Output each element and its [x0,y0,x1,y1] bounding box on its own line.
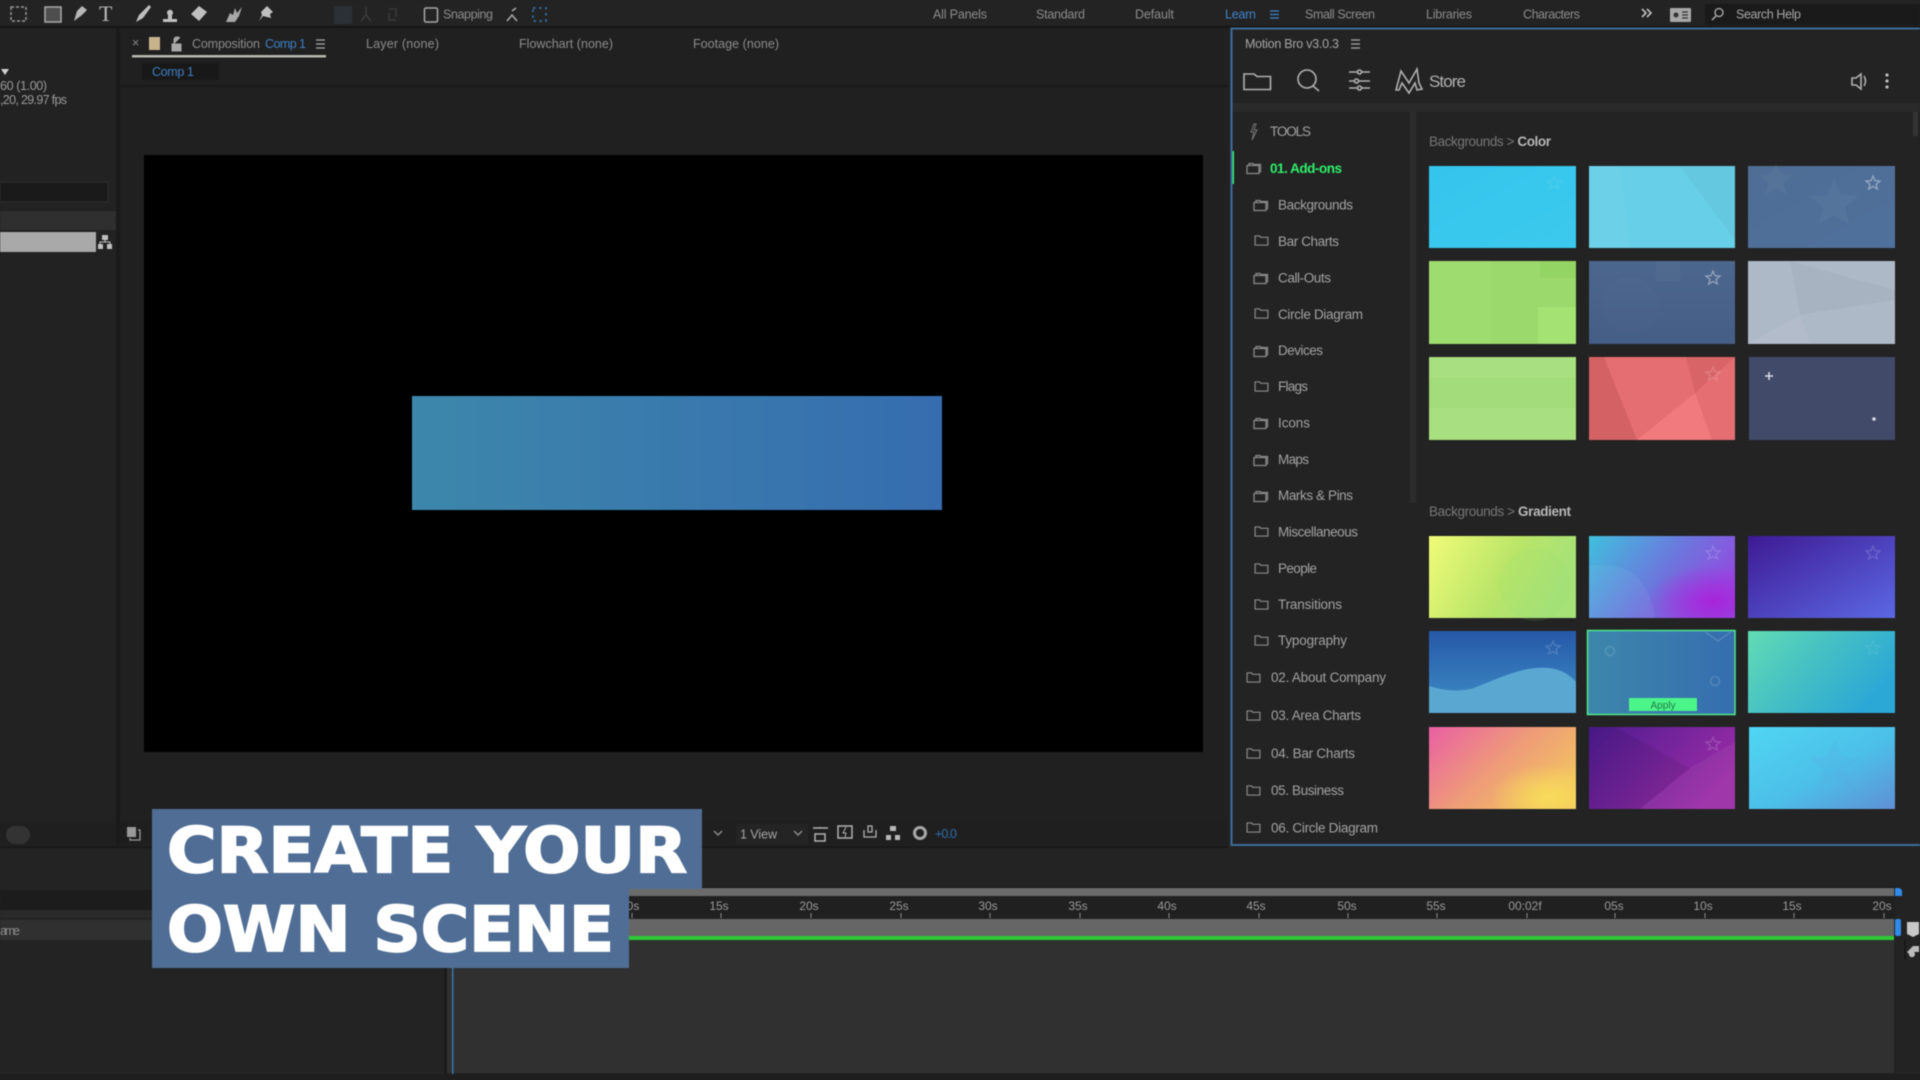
timeline layer header: ame [0,924,20,938]
heading: backgrounds gradient: Backgrounds > Gradient [1429,504,1572,519]
thumbnail: blue waves [1429,631,1576,713]
workspace tabs [933,8,1651,22]
left project panel [0,28,120,845]
sidebar: subcategory list: Backgrounds [1278,198,1353,212]
time ruler: 15s [709,899,729,913]
thumbnail: coral [1589,357,1735,440]
thumbnail: green blocks [1429,261,1576,344]
thumbnail: navy [1589,261,1735,344]
time ruler: 30s [978,899,998,913]
comp breadcrumb: Comp 1 [152,65,194,79]
sidebar: subcategory list: Transitions [1278,597,1342,612]
sidebar: subcategory list: Circle Diagram [1278,307,1363,322]
thumbnail: slate star [1748,162,1895,248]
snapping checkbox: Snapping [443,8,493,22]
sidebar: main categories: 03. Area Charts [1271,708,1361,723]
top toolbar [0,1,1920,28]
playhead [452,968,454,1074]
sidebar: subcategory list: Maps [1278,452,1309,467]
thumbnail: blue violet [1589,536,1735,618]
search help box [1670,4,1920,25]
panel title: Motion Bro v3.0.3 [1245,37,1339,51]
gradient background layer [412,396,942,510]
panel tabs: Flowchart (none) [519,37,613,51]
sidebar: subcategory list: Marks & Pins [1278,488,1353,503]
time ruler: 45s [1246,899,1266,913]
sidebar: main categories: 04. Bar Charts [1271,746,1355,761]
workspace tabs: All Panels [933,8,987,22]
time ruler: 0s [627,899,639,913]
sidebar: subcategory list: Bar Charts [1278,234,1339,249]
sidebar: active category: 01. Add-ons [1270,161,1342,176]
workspace tabs: Learn [1225,8,1256,22]
thumbnail: light green [1429,357,1576,440]
panel tabs: × [132,36,139,50]
thumbnail: yellow green [1429,536,1576,621]
caption line one: CREATE YOUR [167,814,687,887]
Motion Bro panel [1231,28,1920,845]
panel toolbar icons: Store [1429,72,1466,91]
viewer footer controls: +0.0 [935,827,957,841]
toolbar tool icons: T [99,1,113,26]
thumbnail: pink orange [1429,727,1576,809]
flowchart icon [98,235,112,249]
time ruler: 55s [1426,899,1446,913]
layer duration bar [629,919,1919,960]
left project panel: ,20, 29.97 fps [0,93,67,107]
thumbnail: deep indigo [1748,536,1895,618]
thumbnail grid: gradient [1429,536,1895,809]
time ruler: 15s [1782,899,1802,913]
viewer footer controls [120,820,1228,845]
thumbnail: indigo sparkle [1749,357,1895,440]
sidebar: subcategory list: Icons [1278,416,1310,430]
time ruler: 05s [1604,899,1624,913]
workspace tabs: Default [1135,8,1175,22]
sidebar: tools entry [1251,124,1311,140]
panel tabs: Composition [192,37,260,51]
time ruler: 10s [1693,899,1713,913]
workspace tabs: Small Screen [1305,8,1375,22]
apply button: Apply [1650,700,1676,712]
comp breadcrumb [142,63,219,80]
workspace tabs: Libraries [1426,8,1472,22]
sidebar: main categories: 06. Circle Diagram [1271,820,1378,836]
apply button [1629,698,1697,712]
search help box: Search Help [1736,8,1801,22]
black composition canvas [144,155,1203,752]
sidebar: subcategory list: Devices [1278,343,1323,358]
left project panel: 60 (1.00) [0,79,47,93]
caption line two: OWN SCENE [167,893,614,966]
sidebar: active category [1231,151,1342,184]
time ruler: 20s [799,899,819,913]
thumbnail grid: color [1429,162,1895,440]
heading: backgrounds color: Backgrounds > Color [1429,134,1552,149]
thumbnail: light cyan [1589,166,1735,248]
sidebar: main categories: 02. About Company [1271,670,1386,685]
time ruler: 35s [1068,899,1088,913]
sidebar: subcategory list: Miscellaneous [1278,524,1358,540]
viewer footer controls: 1 View [740,828,778,842]
thumbnail: teal [1748,631,1895,713]
caption: create your own scene [152,809,702,968]
workspace tabs: Standard [1036,8,1085,22]
thumbnail: selected with apply button [1588,630,1735,714]
sidebar: main categories [1247,670,1386,836]
timeline panel [0,846,1920,1080]
panel toolbar icons [1244,69,1889,93]
sidebar: subcategory list: People [1278,561,1317,576]
snapping checkbox [424,8,546,22]
workspace tabs: Characters [1523,8,1580,22]
sidebar: tools entry: TOOLS [1270,124,1311,139]
toolbar tool icons [11,1,396,26]
composition viewer panel [120,28,1228,845]
sidebar: subcategory list: Flags [1278,379,1308,394]
thumbnail: purple [1589,727,1735,809]
time ruler: 00:02f [1508,899,1542,913]
time ruler: 40s [1157,899,1177,913]
timeline track area [446,940,1894,1073]
thumbnail: sky star [1749,727,1895,809]
time ruler [627,897,1895,918]
sidebar: subcategory list: Typography [1278,633,1347,648]
panel tabs: Comp 1 [265,37,306,51]
sidebar: subcategory list: Call-Outs [1278,270,1331,286]
panel tabs [132,36,779,58]
sidebar: main categories: 05. Business [1271,783,1344,798]
time ruler: 20s [1872,899,1892,913]
timeline layer header [0,890,446,940]
thumbnail: pale grey [1748,261,1895,344]
panel tabs: Footage (none) [693,37,779,51]
panel tabs: Layer (none) [366,37,439,51]
work area bar [629,887,1902,896]
sidebar: subcategory list [1254,198,1363,648]
time ruler: 25s [889,899,909,913]
panel focus border [1232,28,1920,845]
time ruler: 50s [1337,899,1357,913]
thumbnail: cyan [1429,166,1576,248]
